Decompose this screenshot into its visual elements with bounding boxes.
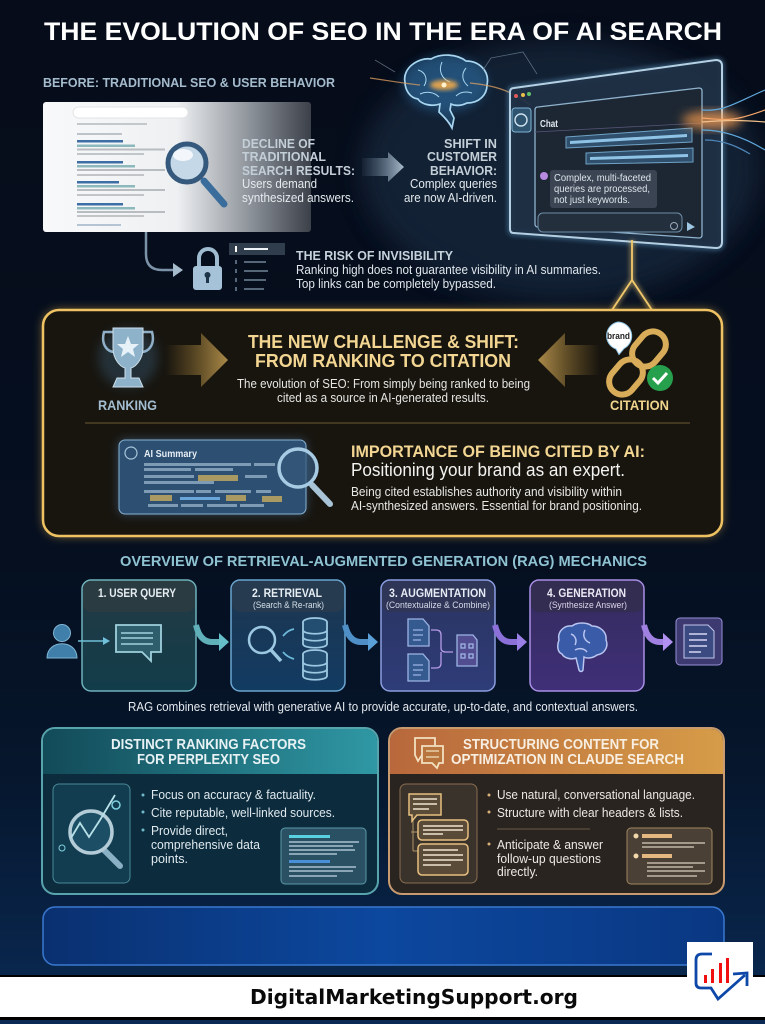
rag step 2: retrieval: [231, 580, 345, 691]
text: evolution description: The evolution of SEO: From simply being ranked to being: [237, 377, 530, 391]
text: importance of being cited: Being cited establishes authority and visibility within: [351, 485, 622, 499]
connector: results to risk: [146, 232, 183, 277]
bullet list: Focus on accuracy & factuality.: [151, 787, 316, 802]
footer text: DigitalMarketingSupport.org: [250, 985, 578, 1009]
icon: magnifier on summary: [279, 449, 330, 504]
logo: chart bubble: [687, 942, 753, 999]
icon: trophy: [98, 328, 158, 388]
arrow: ranking to centre: [165, 333, 228, 387]
mini document card: [281, 828, 366, 884]
arrow: step 2 to 3: [345, 625, 378, 651]
text: shift in customer behavior: are now AI-driven.: [404, 190, 497, 205]
heading: new challenge: [248, 331, 519, 371]
panel: claude search: [389, 728, 724, 894]
icon: output document: [676, 618, 722, 665]
arrow: citation to centre: [538, 333, 600, 387]
rag step 4: generation: [530, 580, 644, 691]
bullet list: Use natural, conversational language.: [497, 787, 695, 802]
rag step 3: augmentation: [381, 580, 495, 691]
icon: green check: [647, 365, 673, 391]
title: THE EVOLUTION OF SEO IN THE ERA OF AI SEARCH: [44, 18, 722, 46]
rag step 2: retrieval: (Search & Re-rank): [253, 600, 324, 611]
panel: empty blue banner: [43, 907, 724, 965]
message bubble: not just keywords.: [554, 195, 630, 206]
bullet list: comprehensive data: [151, 837, 261, 852]
chat label: Chat: [540, 118, 558, 130]
icon: user: [47, 624, 77, 658]
message bubble: [550, 170, 657, 208]
icon: documents combined: [408, 619, 477, 681]
panel heading: [111, 737, 306, 768]
chat window: [510, 60, 722, 248]
text: importance of being cited: IMPORTANCE OF BEING CITED BY AI:: [351, 443, 645, 461]
text: shift in customer behavior: SHIFT IN: [444, 136, 497, 151]
bullet list: [142, 787, 335, 866]
rag step 1: user query: [82, 580, 196, 691]
assistant avatar: [540, 172, 548, 180]
heading: new challenge: FROM RANKING TO CITATION: [255, 350, 511, 371]
icon: magnifier with chart: [53, 784, 130, 883]
text: shift in customer behavior: CUSTOMER: [427, 149, 498, 164]
arrow: step 1 to 2: [196, 625, 229, 651]
panel heading: STRUCTURING CONTENT FOR: [463, 737, 659, 753]
message bubble: queries are processed,: [554, 184, 650, 195]
chat bubble two: [586, 148, 693, 164]
text: risk of invisibility: [296, 249, 601, 291]
rag step 4: generation: 4. GENERATION: [547, 588, 626, 600]
icon: search with databases: [249, 618, 327, 680]
text: decline of traditional search results: synthesized answers.: [242, 190, 354, 205]
caption: rag summary: RAG combines retrieval with generative AI to provide accurate, up-to-date, and contextual answers.: [128, 700, 638, 714]
bullet list: points.: [151, 851, 188, 866]
arrow: user to query: [78, 637, 110, 645]
icon: brand bubble: brand: [607, 331, 630, 341]
text: importance of being cited: [351, 443, 645, 513]
panel heading: DISTINCT RANKING FACTORS: [111, 737, 306, 753]
icon: chat bubbles: [415, 738, 443, 768]
icon: glowing brain: [370, 52, 537, 128]
text: evolution description: [237, 377, 530, 405]
arrow: step 3 to 4: [495, 625, 527, 651]
text: risk of invisibility: Ranking high does not guarantee visibility in AI summaries.: [296, 263, 601, 277]
chat bubble one: [566, 128, 692, 148]
bullet list: [488, 787, 695, 879]
bullet list: Structure with clear headers & lists.: [497, 805, 683, 820]
text: decline of traditional search results: SEARCH RESULTS:: [242, 163, 355, 178]
text: shift in customer behavior: [404, 136, 498, 205]
icon: brand bubble: [607, 322, 632, 354]
panel: perplexity seo: [42, 728, 378, 894]
message bubble: Complex, multi-faceted: [554, 173, 651, 184]
connector: chat to gold panel: [612, 240, 652, 310]
text: shift in customer behavior: Complex queries: [410, 176, 497, 191]
icon: magnifier over results: [168, 144, 224, 204]
ai summary card: AI Summary: [144, 448, 197, 460]
icon: speech bubble: [116, 625, 161, 661]
heading: new challenge: THE NEW CHALLENGE & SHIFT:: [248, 331, 519, 352]
panel heading: FOR PERPLEXITY SEO: [137, 752, 280, 768]
rag step 3: augmentation: 3. AUGMENTATION: [389, 588, 486, 600]
rag step 2: retrieval: 2. RETRIEVAL: [252, 588, 322, 600]
ranked links list: [229, 243, 285, 291]
text: evolution description: cited as a source in AI-generated results.: [277, 391, 489, 405]
text: risk of invisibility: THE RISK OF INVISIBILITY: [296, 249, 454, 263]
icon: brain: [558, 623, 607, 672]
icon: structured chat: [400, 784, 477, 883]
bullet list: directly.: [497, 864, 538, 879]
text: decline of traditional search results: Users demand: [242, 176, 317, 191]
text: importance of being cited: Positioning your brand as an expert.: [351, 460, 625, 480]
label: citation: CITATION: [610, 397, 669, 413]
text: risk of invisibility: Top links can be completely bypassed.: [296, 277, 496, 291]
footer band: [0, 975, 765, 1020]
bullet list: Anticipate & answer: [497, 837, 604, 852]
ai summary card: [119, 440, 306, 514]
rag step 3: augmentation: (Contextualize & Combine): [386, 600, 490, 611]
circuit glow right of chat: [682, 90, 765, 154]
input box: [538, 213, 695, 232]
mini outline card: [627, 828, 712, 884]
panel heading: OPTIMIZATION IN CLAUDE SEARCH: [451, 752, 684, 768]
label: ranking: RANKING: [98, 397, 157, 413]
text: decline of traditional search results: TRADITIONAL: [242, 149, 326, 164]
bullet list: Cite reputable, well-linked sources.: [151, 805, 335, 820]
panel heading: [451, 737, 684, 768]
text: importance of being cited: AI-synthesized answers. Essential for brand positioning.: [351, 499, 642, 513]
rag step 4: generation: (Synthesize Answer): [549, 600, 627, 611]
bullet list: Provide direct,: [151, 823, 228, 838]
rag step 1: user query: 1. USER QUERY: [98, 588, 176, 600]
arrow: step 4 to output: [644, 625, 673, 651]
heading: rag overview: OVERVIEW OF RETRIEVAL-AUGMENTED GENERATION (RAG) MECHANICS: [120, 553, 647, 570]
icon: lock: [193, 249, 222, 290]
panel: new challenge: [43, 310, 722, 536]
text: decline of traditional search results: DECLINE OF: [242, 136, 315, 151]
arrow: decline to shift: [362, 152, 404, 182]
text: shift in customer behavior: BEHAVIOR:: [430, 163, 497, 178]
section heading: before: BEFORE: TRADITIONAL SEO & USER BEHAVIOR: [43, 75, 336, 90]
panel: search results page: [43, 102, 311, 232]
icon: assistant logo: [512, 108, 531, 132]
icon: chain link: [604, 326, 671, 400]
bullet list: follow-up questions: [497, 851, 601, 866]
text: decline of traditional search results: [242, 136, 355, 205]
